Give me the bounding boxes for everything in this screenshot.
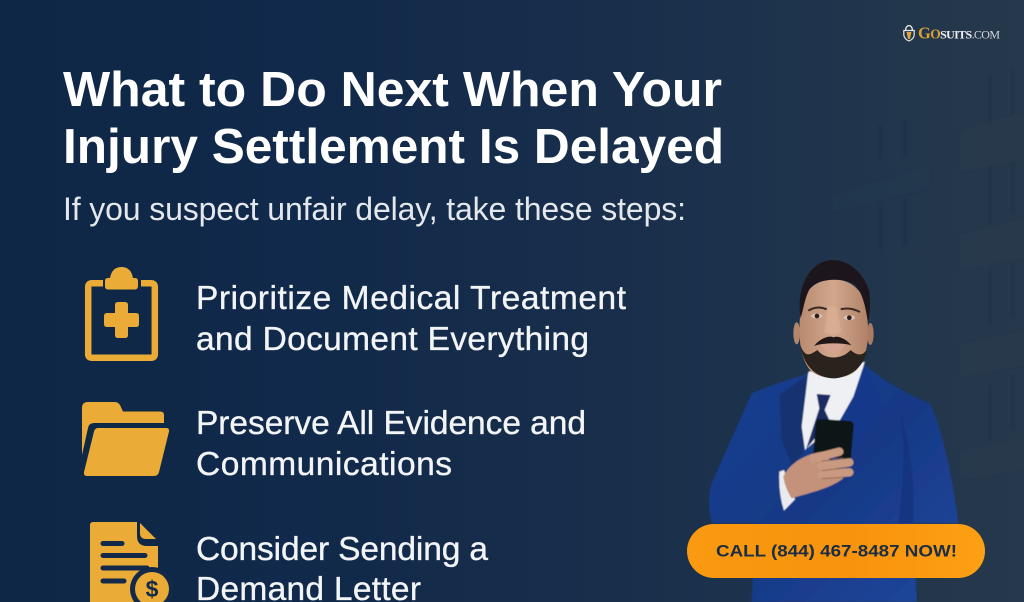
left lapel <box>779 375 807 465</box>
logo wordmark: GOSUITS.COM <box>918 24 1000 42</box>
face <box>800 279 868 378</box>
title: Injury Settlement Is Delayed <box>63 119 724 174</box>
icon: lock shield <box>904 26 914 41</box>
subtitle: If you suspect unfair delay, take these steps: <box>63 191 686 227</box>
title: What to Do Next When Your <box>63 62 722 117</box>
title <box>63 62 724 174</box>
faint building backdrop <box>833 70 1024 480</box>
sleeve shading <box>898 413 914 523</box>
text: step 2: Communications <box>196 446 452 483</box>
nose <box>824 307 841 334</box>
text: step 3: Consider Sending a <box>196 531 488 568</box>
phone <box>813 419 854 460</box>
logo: GoSuits.com <box>904 24 1000 42</box>
text: step 1: Prioritize Medical Treatment <box>196 280 627 317</box>
cuff <box>779 470 795 511</box>
text: step 1 <box>196 280 627 358</box>
text: step 1: and Document Everything <box>196 321 589 358</box>
icon: clipboard with medical cross <box>88 267 155 358</box>
tie <box>806 394 831 449</box>
call to action button <box>687 524 985 578</box>
head <box>793 260 874 378</box>
icon: document with dollar coin <box>90 522 174 602</box>
right lapel <box>840 366 883 443</box>
step 1: medical treatment <box>88 267 627 358</box>
text: step 2: Preserve All Evidence and <box>196 405 586 442</box>
beard <box>800 344 867 378</box>
step 2: evidence <box>82 402 586 483</box>
text: step 2 <box>196 405 586 483</box>
mouth <box>822 344 845 352</box>
hand <box>783 452 849 498</box>
text: step 3 <box>196 531 488 602</box>
eyes and brows <box>808 307 860 320</box>
shirt <box>802 362 865 450</box>
suit <box>709 365 958 602</box>
icon: folder <box>82 402 169 476</box>
call to action button: CALL (844) 467-8487 NOW! <box>716 542 957 560</box>
hair <box>800 260 870 323</box>
photo: attorney in blue suit holding phone <box>709 260 958 602</box>
step 3: demand letter <box>90 522 488 602</box>
ears <box>793 322 800 344</box>
icon: document with dollar coin: $ <box>146 576 159 602</box>
mustache <box>814 337 851 346</box>
